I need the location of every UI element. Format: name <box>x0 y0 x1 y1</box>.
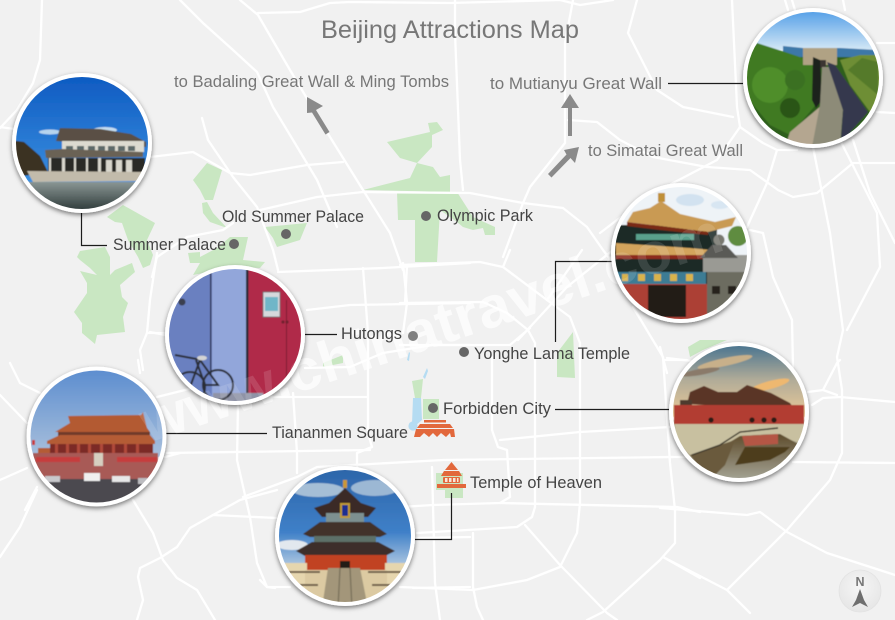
photo: Summer Palace marble boat <box>10 70 155 213</box>
icon: Temple of Heaven <box>437 462 466 488</box>
watermark on map: www.chinatravel.com <box>131 200 731 456</box>
photo: Mutianyu Great Wall <box>743 8 885 152</box>
direction label: Badaling: to Badaling Great Wall & Ming Tombs <box>174 73 449 91</box>
title: Beijing Attractions Map <box>321 16 579 44</box>
direction label: Simatai: to Simatai Great Wall <box>588 142 743 160</box>
label: Forbidden City: Forbidden City <box>443 400 552 418</box>
label: Summer Palace: Summer Palace <box>113 236 226 254</box>
arrow: to Mutianyu <box>561 94 579 136</box>
watermark over photos: www.chinatravel.com <box>131 200 731 456</box>
label: Olympic Park: Olympic Park <box>437 207 534 225</box>
icon: Tiananmen gate <box>414 420 455 437</box>
photo: Tiananmen Gate <box>26 366 167 509</box>
photo: Forbidden City Meridian Gate <box>669 342 809 485</box>
marker: Yonghe Lama Temple <box>459 347 469 357</box>
photo: Temple of Heaven <box>275 466 417 608</box>
arrow: to Simatai <box>548 147 579 178</box>
marker: Forbidden City <box>428 403 438 413</box>
parks <box>74 122 727 498</box>
label: Tiananmen Square: Tiananmen Square <box>272 424 408 442</box>
photo: Yonghe Lama Temple <box>611 183 752 326</box>
photo: Hutong door and bicycle <box>165 265 305 405</box>
label: Yonghe Lama Temple: Yonghe Lama Temple <box>474 345 630 363</box>
marker: Old Summer Palace <box>281 229 291 239</box>
marker: Hutongs <box>408 331 418 341</box>
compass: north arrow: N <box>855 575 865 589</box>
marker: Olympic Park <box>421 211 431 221</box>
leader lines <box>82 84 743 540</box>
label: Temple of Heaven: Temple of Heaven <box>470 474 602 492</box>
label: Hutongs: Hutongs <box>341 325 402 343</box>
label: Old Summer Palace: Old Summer Palace <box>222 208 364 226</box>
arrow: to Badaling <box>307 97 330 134</box>
direction label: Mutianyu: to Mutianyu Great Wall <box>490 75 662 93</box>
marker: Summer Palace <box>229 239 239 249</box>
compass: north arrow <box>839 570 881 612</box>
lakes <box>407 352 428 431</box>
